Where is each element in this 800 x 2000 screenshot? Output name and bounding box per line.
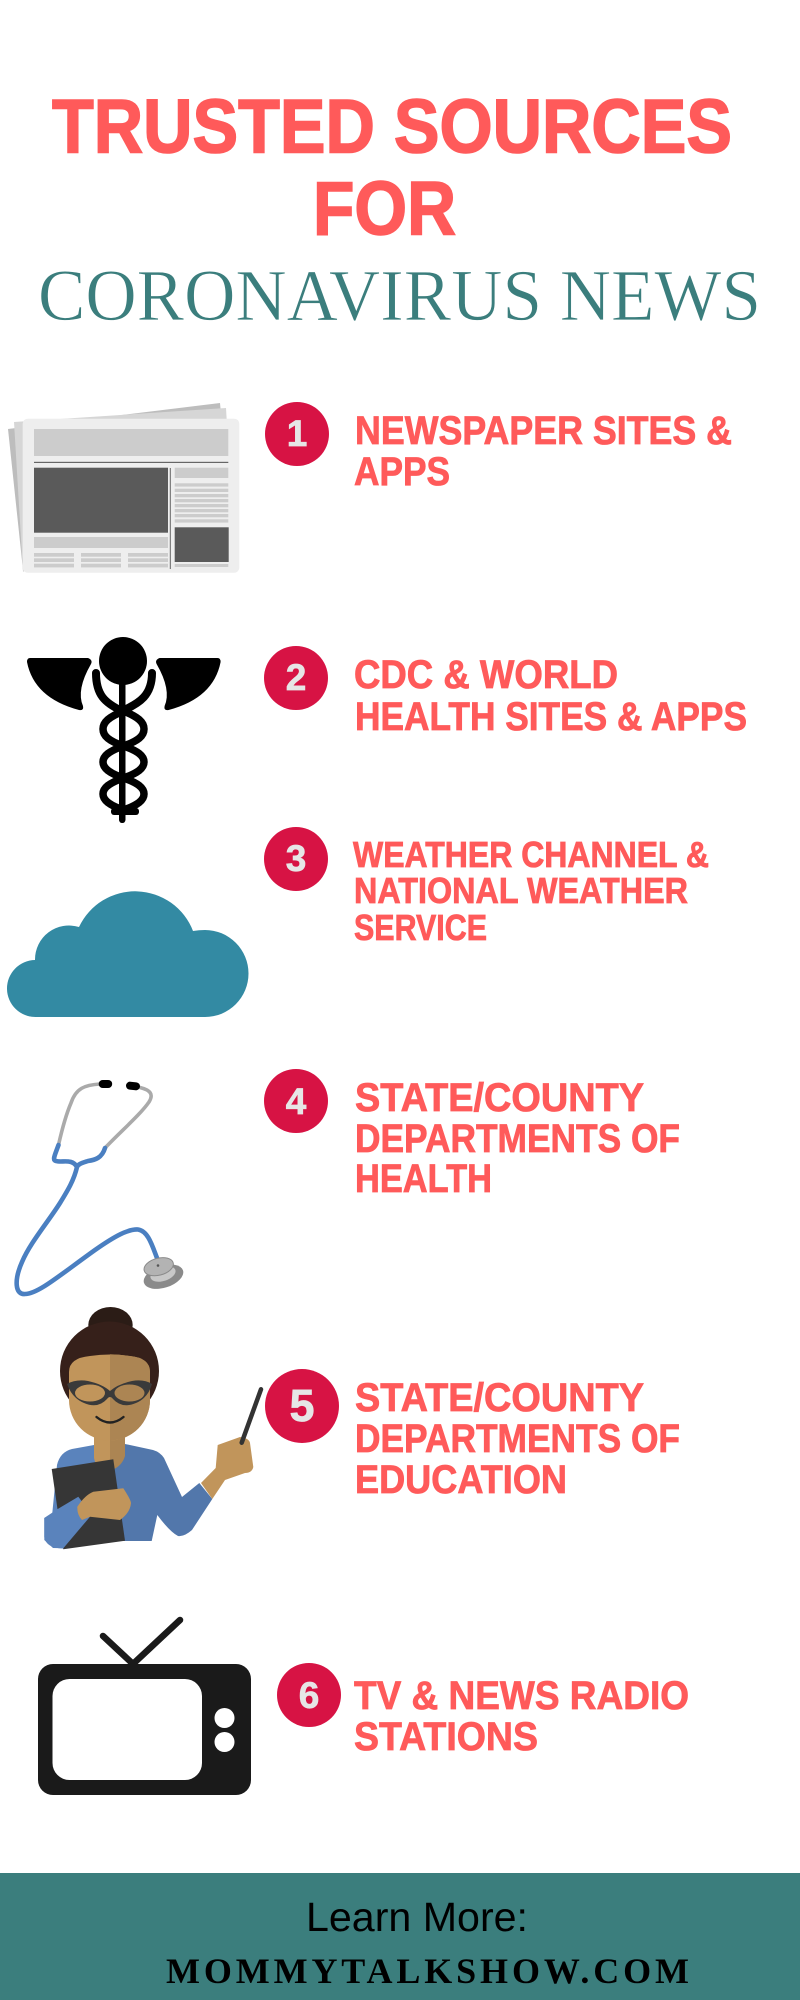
item 4: STATE/COUNTY — [355, 1076, 644, 1120]
item 5: STATE/COUNTY — [355, 1376, 644, 1420]
item 4: DEPARTMENTS OF — [355, 1117, 680, 1161]
icon: television — [38, 1620, 251, 1795]
item 6: TV & NEWS RADIO — [354, 1674, 689, 1718]
item 3: SERVICE — [354, 907, 487, 948]
icon: caduceus — [27, 637, 221, 823]
item 2: CDC & WORLD — [354, 653, 618, 697]
item 4: 4 — [286, 1081, 307, 1122]
footer band — [0, 1873, 800, 2000]
item 3: NATIONAL WEATHER — [354, 870, 688, 911]
item 2: 2 — [286, 657, 306, 698]
item 1: 1 — [287, 413, 307, 454]
item 5: EDUCATION — [355, 1458, 567, 1502]
item 1: APPS — [354, 450, 450, 494]
item 4: HEALTH — [355, 1157, 492, 1201]
item 1: NEWSPAPER SITES & — [355, 409, 732, 453]
title — [38, 84, 761, 336]
footer band: MOMMYTALKSHOW.COM — [166, 1951, 689, 1991]
item 5: 5 — [289, 1380, 315, 1431]
icon: newspaper — [8, 403, 239, 573]
title: FOR — [313, 166, 456, 252]
item 6: 6 — [299, 1675, 319, 1716]
item 6: STATIONS — [354, 1715, 538, 1759]
item 5: DEPARTMENTS OF — [355, 1417, 680, 1461]
footer band: Learn More: — [306, 1894, 528, 1940]
item 3: 3 — [286, 838, 306, 879]
item 3: WEATHER CHANNEL & — [353, 834, 709, 875]
item 1 — [265, 402, 732, 494]
item 3 — [264, 827, 709, 948]
title: CORONAVIRUS NEWS — [38, 255, 761, 336]
item 6 — [277, 1663, 689, 1759]
icon: stethoscope — [17, 1080, 186, 1294]
item 2 — [264, 646, 747, 739]
item 5 — [265, 1369, 680, 1502]
icon: cloud — [7, 891, 248, 1017]
item 2: HEALTH SITES & APPS — [355, 695, 747, 739]
icon: teacher — [44, 1307, 261, 1549]
title: TRUSTED SOURCES — [52, 84, 732, 170]
item 4 — [264, 1069, 680, 1201]
